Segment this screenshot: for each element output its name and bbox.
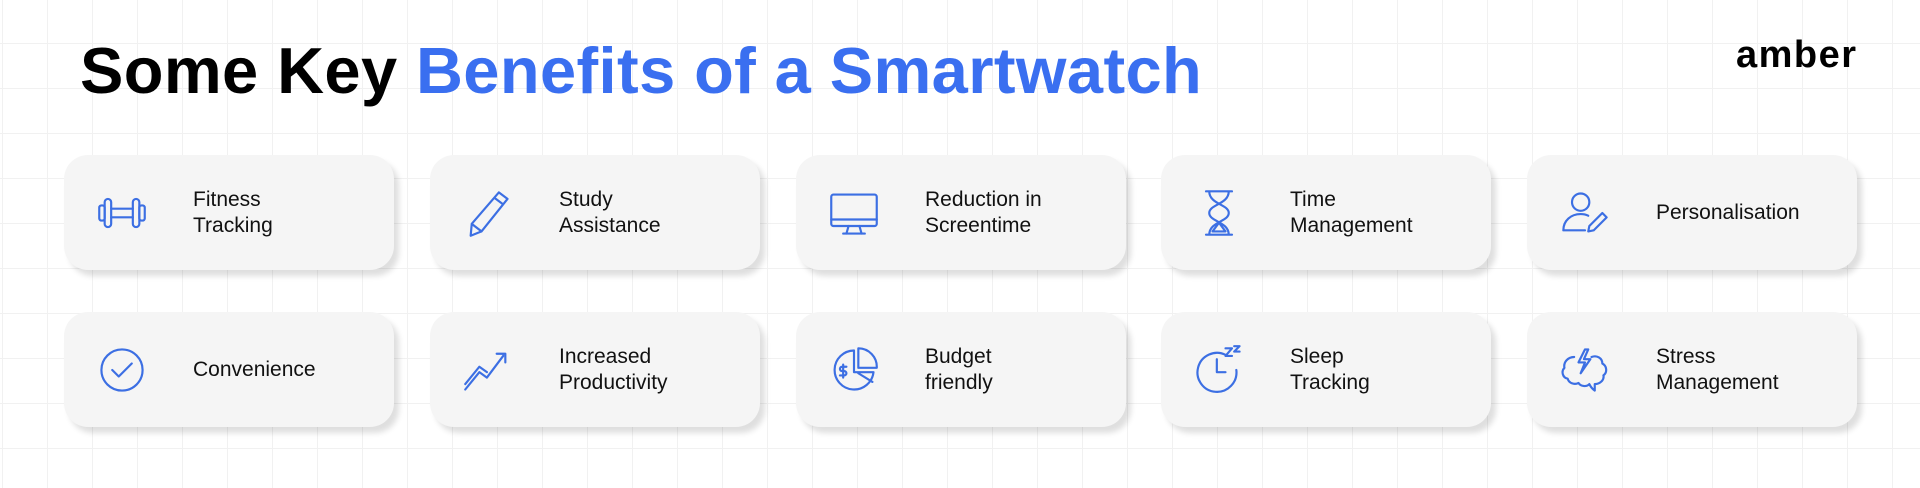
label: Sleep — [1290, 344, 1344, 368]
icon: dumbbell — [98, 198, 146, 228]
logo: amber — [1736, 34, 1858, 76]
card: time management — [1161, 155, 1491, 270]
icon: check circle — [100, 348, 144, 392]
label — [925, 188, 1042, 236]
label — [925, 344, 993, 394]
label — [1290, 344, 1370, 394]
label: Reduction in — [925, 188, 1042, 210]
icon: trend arrow — [464, 352, 506, 391]
label: Productivity — [559, 370, 668, 394]
label: friendly — [925, 370, 993, 394]
card: sleep — [1161, 312, 1491, 427]
label: Budget — [925, 344, 992, 368]
label: Convenience — [193, 358, 316, 380]
label — [1656, 344, 1779, 394]
title: Some Key Benefits of a Smartwatch — [80, 34, 1202, 107]
icon: clock with zz — [1196, 345, 1241, 393]
card: screentime — [796, 155, 1126, 270]
icon: pie chart coin — [834, 347, 878, 391]
label: Increased — [559, 344, 651, 368]
icon: monitor — [830, 194, 878, 235]
label — [559, 344, 668, 394]
card: personalisation — [1527, 155, 1857, 270]
label: Management — [1656, 370, 1779, 394]
card: productivity — [430, 312, 760, 427]
card: convenience — [64, 312, 394, 427]
label — [559, 188, 661, 236]
label — [193, 188, 273, 236]
icon: hourglass — [1204, 190, 1234, 236]
label: Management — [1290, 214, 1413, 236]
icon: user edit — [1562, 192, 1608, 232]
icon: pencil — [470, 191, 509, 237]
card: fitness tracking — [64, 155, 394, 270]
label: Stress — [1656, 344, 1716, 368]
card: stress — [1527, 312, 1857, 427]
card: study assistance — [430, 155, 760, 270]
label: Fitness — [193, 188, 261, 210]
label: Tracking — [1290, 370, 1370, 394]
card: budget — [796, 312, 1126, 427]
label: Study — [559, 188, 613, 210]
label — [1290, 188, 1413, 236]
label: Personalisation — [1656, 200, 1800, 224]
label: Time — [1290, 188, 1336, 210]
label: Tracking — [193, 214, 273, 236]
icon: brain bolt — [1561, 348, 1608, 392]
label: Assistance — [559, 214, 661, 236]
label: Screentime — [925, 214, 1031, 236]
